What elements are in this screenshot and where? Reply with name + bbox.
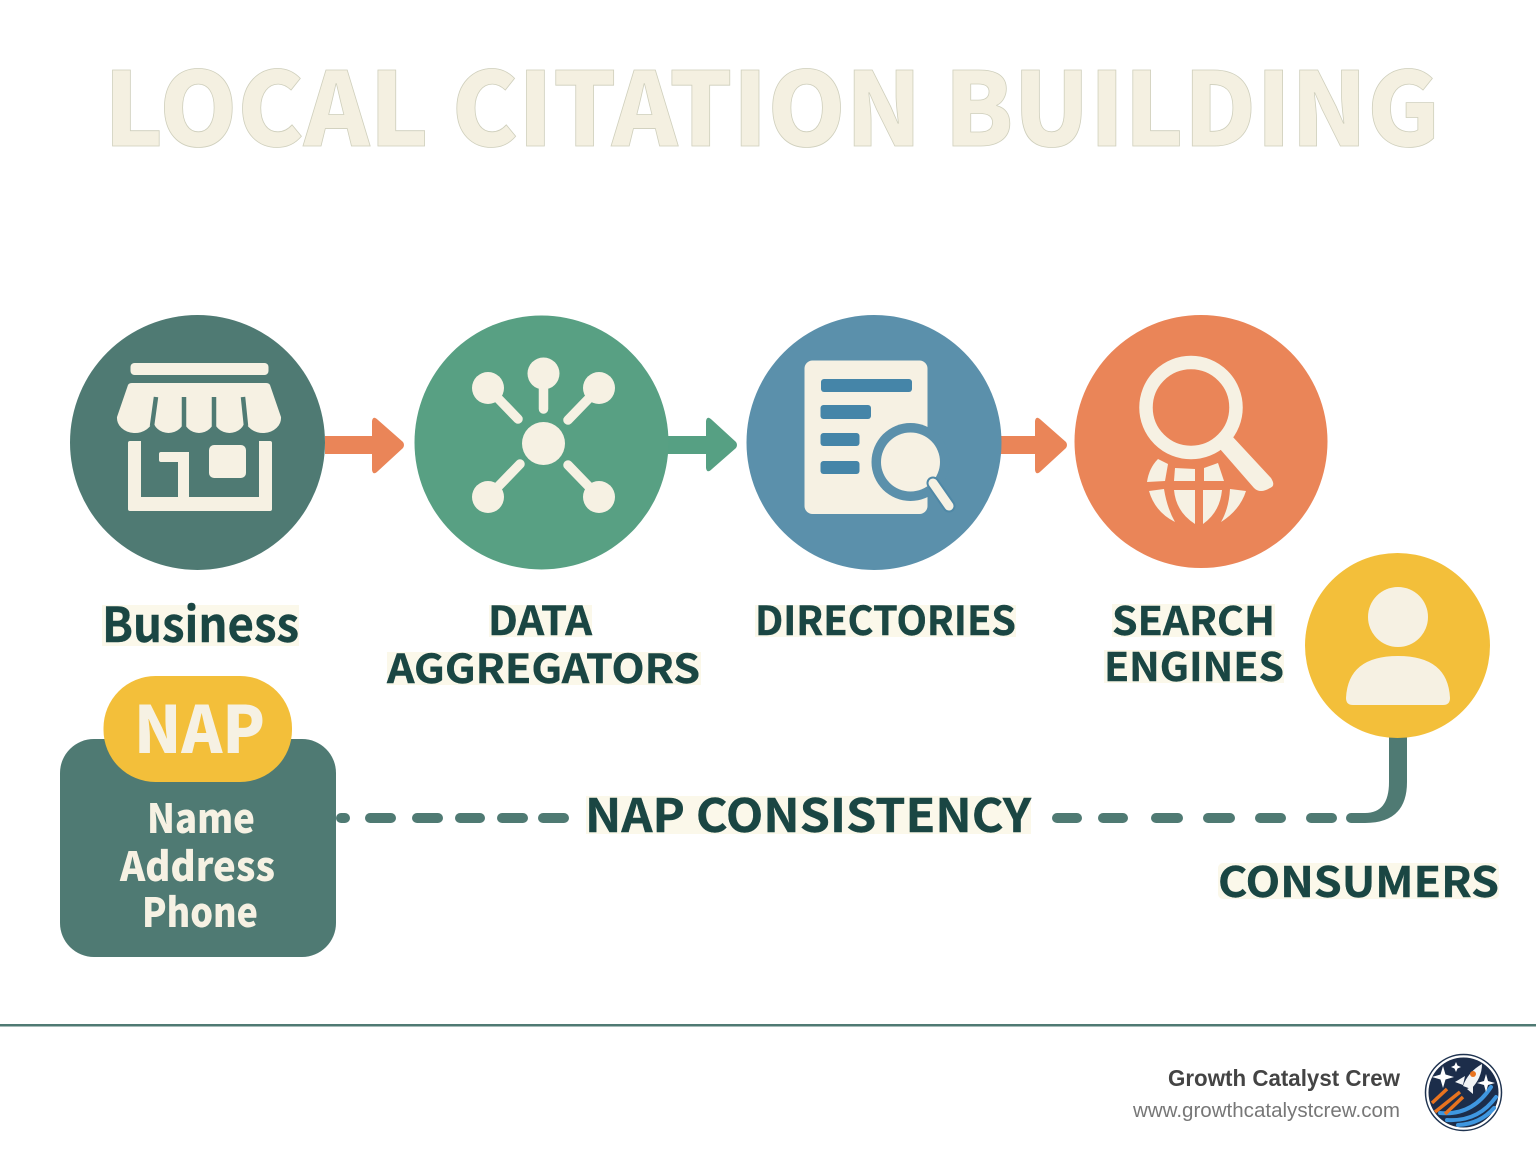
arrow: directories to search engines — [1000, 418, 1067, 473]
label: NAP consistency: NAP CONSISTENCY — [585, 780, 1031, 846]
panel: business node — [70, 315, 325, 570]
icon: network hub — [472, 358, 615, 513]
circle: search engines — [1074, 315, 1328, 568]
title: LOCAL CITATION BUILDING — [104, 29, 1440, 176]
text: name address phone — [119, 787, 275, 939]
panel: NAP card — [60, 676, 336, 957]
circle: business — [70, 315, 325, 570]
icon: person — [1346, 587, 1450, 705]
dashed connector: NAP consistency right — [1052, 813, 1337, 823]
label: consumers: CONSUMERS — [1218, 849, 1499, 910]
panel: directories node — [746, 315, 1002, 570]
label: data aggregators: AGGREGATORS — [386, 637, 700, 695]
label: search engines: SEARCH — [1112, 591, 1275, 647]
footer: brand name: Growth Catalyst Crew — [1168, 1065, 1400, 1091]
arrow: business to aggregators — [325, 418, 404, 473]
label: business: Business — [102, 586, 299, 656]
circle: aggregators — [414, 316, 668, 570]
footer: website: www.growthcatalystcrew.com — [1132, 1100, 1400, 1122]
panel: search engines node — [1074, 315, 1328, 568]
dashed connector: NAP consistency left — [336, 813, 569, 823]
label: search engines — [1104, 591, 1284, 693]
label: directories: DIRECTORIES — [755, 589, 1016, 647]
connector: consumer stem — [1346, 736, 1407, 823]
text: name address phone: Name — [147, 787, 255, 845]
arrow: aggregators to directories — [667, 418, 737, 471]
icon: magnifier over globe — [1146, 362, 1273, 524]
label: search engines: ENGINES — [1104, 637, 1284, 693]
panel: consumers node — [1305, 553, 1490, 823]
icon: rocket logo — [1426, 1054, 1502, 1130]
icon: directory document with magnifier — [804, 360, 950, 514]
icon: storefront — [117, 363, 281, 511]
label: data aggregators: DATA — [488, 589, 592, 647]
text: name address phone: Address — [119, 835, 275, 893]
footer rule — [0, 1024, 1536, 1026]
text: name address phone: Phone — [142, 881, 258, 939]
circle: consumers — [1305, 553, 1490, 738]
badge: NAP — [104, 676, 292, 782]
badge: NAP: NAP — [134, 678, 265, 772]
circle: directories — [746, 315, 1002, 570]
panel: data aggregators node — [414, 316, 668, 570]
label: data aggregators — [386, 589, 701, 695]
card body — [60, 739, 336, 957]
